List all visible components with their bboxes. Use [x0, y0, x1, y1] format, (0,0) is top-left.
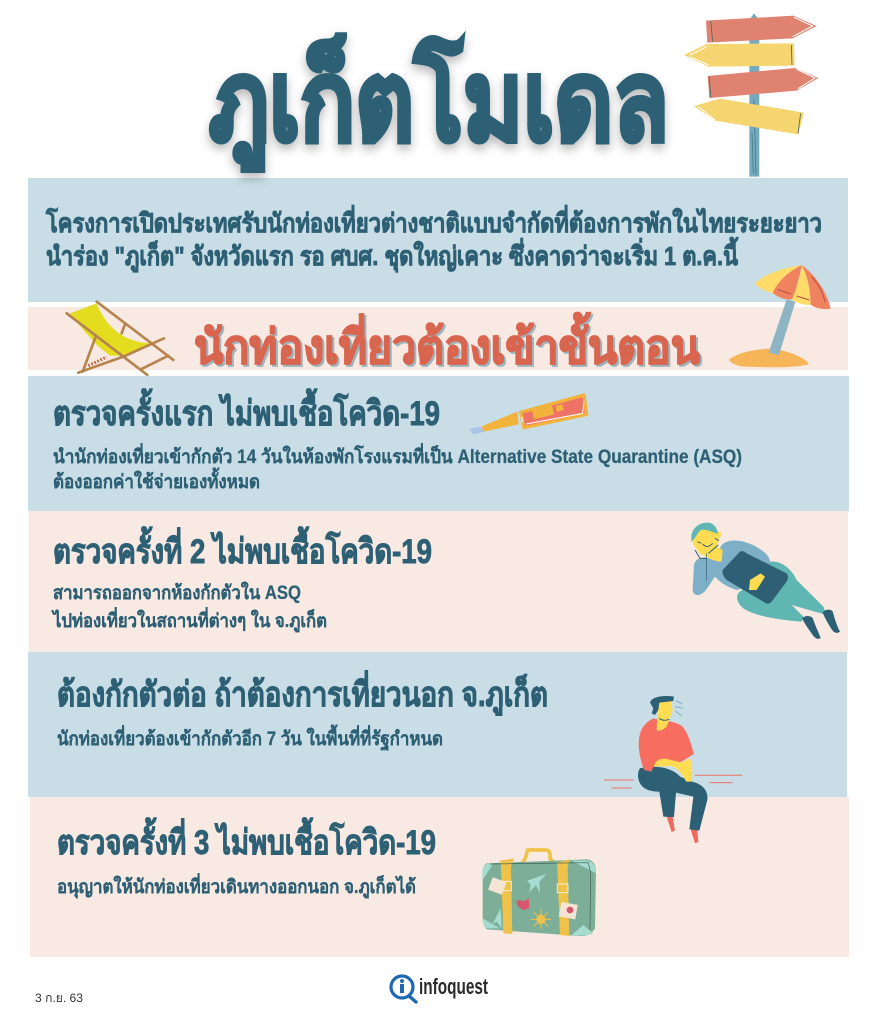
- panel: introduction: [28, 178, 848, 302]
- text: first test line 1: นำนักท่องเที่ยวเข้ากักตัว 14 วันในห้องพักโรงแรมที่เป็น Alternative State Quarantine (ASQ): [53, 443, 742, 468]
- panel: extended quarantine: [28, 652, 847, 797]
- panel: second test: [29, 511, 848, 652]
- text: second test line 1: สามารถออกจากห้องกักตัวใน ASQ: [53, 581, 301, 604]
- icon: suitcase: [483, 850, 596, 936]
- icon: man sitting: [604, 696, 742, 843]
- panel: first test: [28, 376, 849, 511]
- heading: tourists must follow the steps: นักท่องเที่ยวต้องเข้าขั้นตอน: [196, 314, 702, 375]
- icon: beach umbrella: [729, 265, 831, 367]
- panel: third test: [30, 797, 849, 957]
- icon: deck chair: [67, 302, 173, 375]
- title: ภูเก็ตโมเดล: [209, 34, 669, 171]
- panel: section heading band: [28, 307, 848, 375]
- heading: first test: ตรวจครั้งแรก ไม่พบเชื้อโควิด-19: [53, 388, 440, 433]
- icon: thermometer: [469, 395, 587, 434]
- logo: infoquest: [391, 974, 488, 1002]
- text: introduction line 2: นำร่อง "ภูเก็ต" จังหวัดแรก รอ ศบศ. ชุดใหญ่เคาะ ซึ่งคาดว่าจะเริ่ม 1 ต.ค.นี้: [46, 236, 739, 273]
- text: third test detail: อนุญาตให้นักท่องเที่ยวเดินทางออกนอก จ.ภูเก็ตได้: [57, 873, 416, 899]
- text: date: 3 ก.ย. 63: [35, 991, 83, 1005]
- text: extended quarantine detail: นักท่องเที่ยวต้องเข้ากักตัวอีก 7 วัน ในพื้นที่ที่รัฐกำหนด: [57, 724, 443, 752]
- text: second test line 2: ไปท่องเที่ยวในสถานที่ต่างๆ ใน จ.ภูเก็ต: [51, 607, 327, 633]
- icon: magnifier with i: [391, 976, 416, 1002]
- heading: third test: ตรวจครั้งที่ 3 ไม่พบเชื้อโควิด-19: [57, 817, 436, 862]
- icon: man lying down: [691, 523, 840, 639]
- heading: second test: ตรวจครั้งที่ 2 ไม่พบเชื้อโควิด-19: [53, 526, 432, 571]
- text: infoquest wordmark: infoquest: [419, 974, 488, 999]
- icon: signpost: [684, 13, 818, 177]
- heading: tourists must follow the steps: นักท่องเที่ยวต้องเข้าขั้นตอน: [194, 312, 700, 373]
- text: first test line 2: ต้องออกค่าใช้จ่ายเองทั้งหมด: [53, 467, 260, 493]
- heading: extended quarantine: ต้องกักตัวต่อ ถ้าต้องการเที่ยวนอก จ.ภูเก็ต: [57, 670, 548, 716]
